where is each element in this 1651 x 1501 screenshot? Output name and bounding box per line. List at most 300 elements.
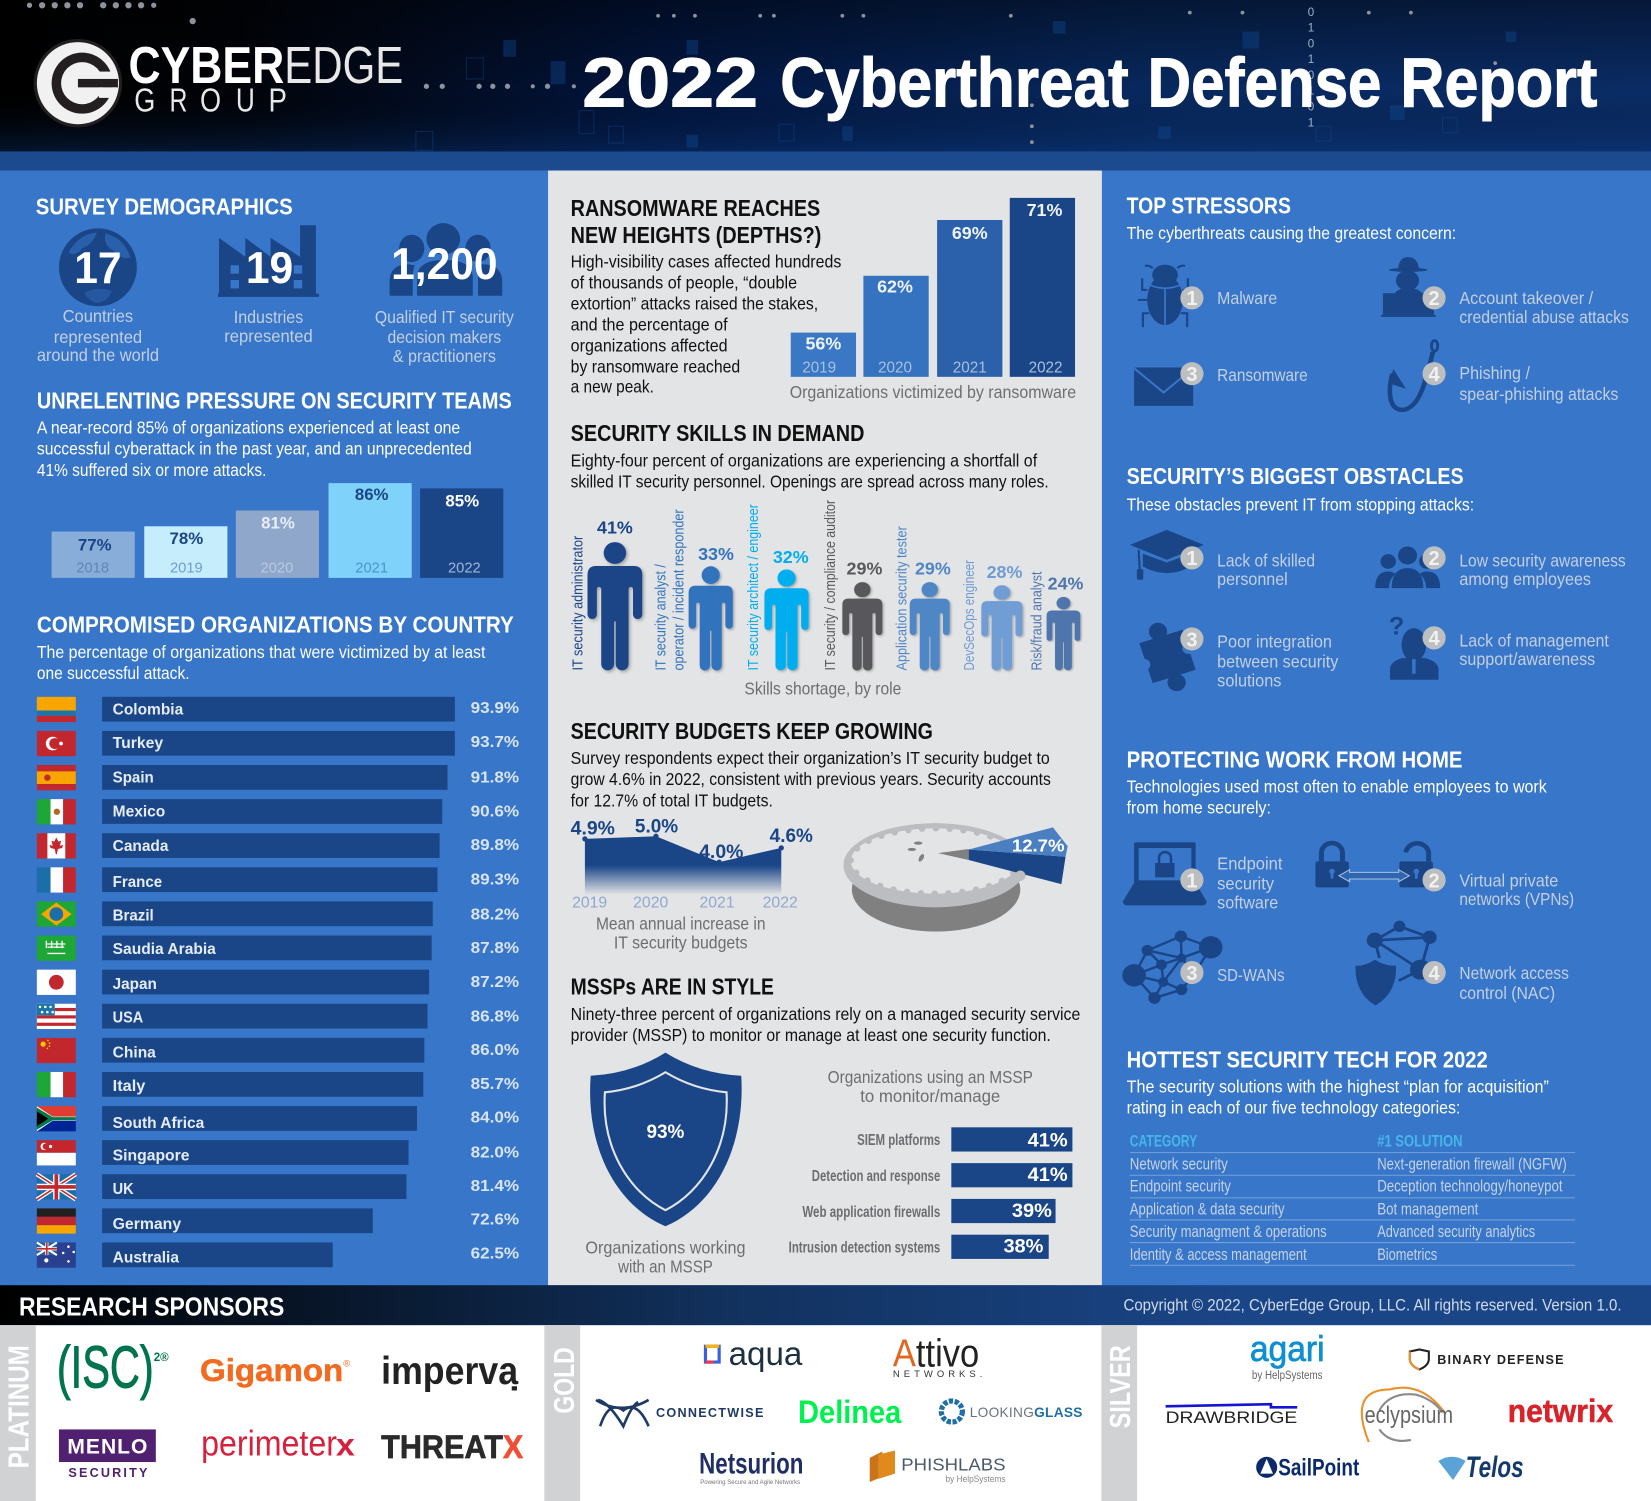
logo: Binary Defense: BINARY DEFENSE xyxy=(1437,1353,1564,1367)
area chart: mean annual increase: 4.0% xyxy=(699,842,744,863)
title: Defense xyxy=(1148,43,1381,121)
text block: ransomware description: extortion” attacks raised the stakes, xyxy=(571,293,818,313)
caption: organizations working with an MSSP: Organizations working xyxy=(585,1238,745,1258)
item: poor integration xyxy=(1138,623,1338,691)
stat: 17 countries: 17 xyxy=(74,244,122,293)
text block: ransomware description: and the percentage of xyxy=(571,315,728,335)
text block: ransomware description: High-visibility cases affected hundreds xyxy=(571,251,841,271)
text block: budgets description: Survey respondents expect their organization’s IT security budget to xyxy=(571,748,1050,768)
country names: Turkey xyxy=(113,735,163,752)
section: MSSPs xyxy=(571,974,1080,1277)
item: network access control: Network access xyxy=(1459,963,1569,983)
text block: pressure description xyxy=(37,418,472,480)
logo: ThreatX: THREATX xyxy=(381,1428,524,1465)
text: industries represented: represented xyxy=(224,326,313,346)
section: security's biggest obstacles xyxy=(1127,463,1626,691)
figure: application security tester xyxy=(895,526,951,671)
bar chart: attacks by year: 86% xyxy=(355,485,389,504)
caption: organizations using an MSSP xyxy=(828,1067,1033,1106)
text block: budgets description: grow 4.6% in 2022, consistent with previous years. Security accounts xyxy=(571,769,1051,789)
header banner: 0 xyxy=(1308,70,1314,82)
heading: ransomware xyxy=(571,195,821,248)
tier tag: platinum: PLATINUM xyxy=(3,1345,35,1468)
caption: mean annual increase xyxy=(596,913,765,952)
item: SD-WANs: 3 xyxy=(1186,963,1197,985)
bar chart: MSSP functions: 39% xyxy=(1012,1201,1052,1222)
text block: country description: one successful attack. xyxy=(37,663,190,683)
heading: security budgets: SECURITY BUDGETS KEEP GROWING xyxy=(571,718,933,744)
header banner: 0 xyxy=(1308,102,1314,114)
table: category and #1 solution: Endpoint security xyxy=(1130,1178,1232,1196)
logo: Menlo Security: MENLO xyxy=(67,1436,147,1459)
icon: envelope xyxy=(1134,368,1193,406)
logo: LookingGlass xyxy=(941,1401,1082,1422)
flags xyxy=(37,697,76,1268)
bar chart: attacks by year: 2020 xyxy=(261,561,293,577)
icon: flag France xyxy=(37,867,76,893)
text block: skills description: Eighty-four percent of organizations are experiencing a shortfall of xyxy=(571,450,1037,470)
icon: laptop with lock xyxy=(1123,842,1206,905)
item: ransomware xyxy=(1134,362,1308,406)
table: category and #1 solution: Application & data security xyxy=(1130,1201,1285,1219)
figure: risk/fraud analyst: 24% xyxy=(1048,573,1084,593)
heading: security skills: SECURITY SKILLS IN DEMAND xyxy=(571,420,864,446)
table: category and #1 solution: #1 SOLUTION xyxy=(1377,1131,1463,1150)
heading: obstacles: SECURITY’S BIGGEST OBSTACLES xyxy=(1127,463,1464,489)
caption: skills shortage: Skills shortage, by role xyxy=(744,679,901,699)
section: protecting work from home xyxy=(1123,746,1574,1005)
bar chart: MSSP functions: Web application firewalls xyxy=(802,1204,940,1221)
logo: Eclypsium: eclypsium xyxy=(1365,1402,1453,1429)
area chart: mean annual increase: 5.0% xyxy=(635,817,678,838)
caption: organizations victimized: Organizations victimized by ransomware xyxy=(790,382,1076,402)
logo wordmark xyxy=(128,36,403,120)
text: countries represented xyxy=(37,306,159,365)
text block: skills description xyxy=(571,450,1049,491)
figure: compliance auditor: 29% xyxy=(847,559,882,579)
logo: Imperva: imperva xyxy=(381,1350,518,1393)
bar chart: organizations victimized by ransomware: 2022 xyxy=(1029,360,1063,377)
header banner: 0 xyxy=(1308,7,1314,19)
country names: UK xyxy=(113,1181,134,1198)
icon: bug xyxy=(1138,265,1192,327)
item: SD-WANs: SD-WANs xyxy=(1217,965,1285,985)
country percentages xyxy=(471,700,519,1262)
table: category and #1 solution xyxy=(1130,1131,1575,1265)
item: account takeover xyxy=(1381,257,1629,327)
icon: shield 93%: 93% xyxy=(646,1122,685,1143)
figure: IT security analyst: 33% xyxy=(698,544,734,564)
heading: unrelenting pressure: UNRELENTING PRESSURE ON SECURITY TEAMS xyxy=(37,387,512,413)
figure: IT security analyst: operator / incident responder xyxy=(671,509,687,671)
icon: fish hook xyxy=(1390,341,1438,410)
bar chart: MSSP functions: 38% xyxy=(1003,1237,1044,1258)
heading: compromised organizations: COMPROMISED ORGANIZATIONS BY COUNTRY xyxy=(37,612,514,638)
bar chart: MSSP functions: 41% xyxy=(1028,1165,1068,1186)
bar chart: MSSP functions: Intrusion detection systems xyxy=(789,1240,940,1257)
text block: pressure description: A near-record 85% of organizations experienced at least one xyxy=(37,418,460,438)
title: Cyberthreat xyxy=(780,43,1129,121)
text block: hottest tech intro: rating in each of our five technology categories: xyxy=(1127,1098,1460,1118)
section: survey demographics xyxy=(36,194,514,366)
icon: flag Japan xyxy=(37,970,76,995)
area chart: mean annual increase: 2019 xyxy=(572,894,607,911)
country names: Italy xyxy=(113,1078,146,1095)
country percentages: 91.8% xyxy=(471,770,519,787)
icon: logo mark xyxy=(34,39,122,127)
text block: country description xyxy=(37,642,485,683)
item: phishing: 4 xyxy=(1429,364,1441,386)
logo: Menlo Security xyxy=(59,1429,156,1480)
logo: PhishLabs xyxy=(870,1450,1006,1484)
item: VPNs: 2 xyxy=(1429,870,1440,892)
stat: 19 industries xyxy=(218,225,319,346)
bar chart: organizations victimized by ransomware: 69% xyxy=(952,223,988,243)
table: category and #1 solution: CATEGORY xyxy=(1130,1131,1197,1150)
item: endpoint security: Endpoint xyxy=(1217,853,1282,873)
country names xyxy=(113,702,216,1267)
icon: people group xyxy=(390,223,502,296)
caption: mean annual increase: IT security budgets xyxy=(614,932,748,952)
item: poor integration: Poor integration xyxy=(1217,631,1332,651)
header banner xyxy=(0,0,1651,171)
bar chart: organizations victimized by ransomware: 2020 xyxy=(878,360,912,377)
bar chart: attacks by year: 78% xyxy=(170,529,203,548)
figure: compliance auditor xyxy=(823,500,882,671)
area chart: mean annual increase: 2020 xyxy=(633,894,668,911)
item: lack of skilled personnel: Lack of skilled xyxy=(1217,550,1315,570)
logo wordmark: R xyxy=(170,83,187,120)
tier tag: gold: GOLD xyxy=(549,1347,581,1414)
pictogram chart: skills shortage by role xyxy=(570,500,1084,671)
table: category and #1 solution: Deception technology/honeypot xyxy=(1377,1178,1563,1196)
logo wordmark: O xyxy=(200,83,221,120)
pie illustration: 12.7% of IT budget: 12.7% xyxy=(1012,836,1065,856)
icon: graduation cap xyxy=(1130,530,1204,580)
logo: PhishLabs: PHISHLABS xyxy=(901,1454,1006,1474)
bar chart: attacks by year: 2021 xyxy=(355,561,388,577)
caption: organizations working with an MSSP xyxy=(585,1238,745,1277)
panel: sponsors xyxy=(0,1325,1651,1501)
country percentages: 87.2% xyxy=(471,974,519,991)
text block: budgets description: for 12.7% of total IT budgets. xyxy=(571,790,773,810)
title xyxy=(582,43,1597,121)
icon: flag China xyxy=(37,1038,76,1063)
logo: (ISC)2: 2® xyxy=(154,1352,169,1364)
country percentages: 88.2% xyxy=(471,906,519,923)
header banner: 1 xyxy=(1308,117,1314,129)
text: qualified IT security decision makers xyxy=(375,307,514,366)
item: lack of management support: support/awareness xyxy=(1459,649,1595,669)
tier tag: silver xyxy=(1101,1325,1137,1501)
text block: hottest tech intro: The security solutions with the highest “plan for acquisition” xyxy=(1127,1077,1549,1097)
figure: DevSecOps engineer: 28% xyxy=(987,562,1022,582)
figure: risk/fraud analyst: Risk/fraud analyst xyxy=(1029,572,1045,671)
country percentages: 87.8% xyxy=(471,940,519,957)
text block: work from home intro: Technologies used most often to enable employees to work xyxy=(1127,777,1547,797)
text: qualified IT security decision makers: decision makers xyxy=(387,327,501,347)
logo wordmark: EDGE xyxy=(284,36,403,94)
heading: ransomware: RANSOMWARE REACHES xyxy=(571,195,820,221)
heading: survey demographics: SURVEY DEMOGRAPHICS xyxy=(36,194,293,220)
item: SD-WANs xyxy=(1124,932,1285,1003)
logo: Netwrix: netwrix xyxy=(1508,1392,1613,1429)
logo wordmark: P xyxy=(268,83,287,120)
header banner: 1 xyxy=(1308,86,1314,98)
figure: IT security analyst: IT security analyst / xyxy=(653,563,669,671)
country percentages: 86.0% xyxy=(471,1042,519,1059)
item: low security awareness: Low security awareness xyxy=(1459,550,1626,570)
item: endpoint security: security xyxy=(1217,873,1274,893)
country names: South Africa xyxy=(113,1115,204,1132)
figure: IT security architect: IT security architect / engineer xyxy=(746,504,762,671)
item: account takeover: 2 xyxy=(1429,288,1440,310)
icon: puzzle piece xyxy=(1138,623,1196,691)
logo: SailPoint xyxy=(1256,1455,1359,1482)
country names: Brazil xyxy=(113,907,154,924)
country bars xyxy=(102,697,455,1267)
country names: Canada xyxy=(113,838,169,855)
bar chart: attacks by year: 2019 xyxy=(170,561,203,577)
icon: shield and network xyxy=(1355,921,1437,1005)
section: unrelenting pressure xyxy=(37,387,512,578)
area chart: mean annual increase: 2022 xyxy=(763,894,798,911)
icon: flag Turkey xyxy=(37,731,76,756)
bar chart: MSSP functions: Detection and response xyxy=(812,1168,940,1185)
country percentages: 84.0% xyxy=(471,1110,519,1127)
icon: factory xyxy=(218,225,319,297)
title: Report xyxy=(1400,43,1597,121)
bar chart: attacks by year: 85% xyxy=(445,491,479,510)
icon: flag Canada xyxy=(37,833,76,858)
item: account takeover: Account takeover / xyxy=(1459,288,1593,308)
panel: middle column background xyxy=(548,171,1102,1285)
bar chart: organizations victimized by ransomware: 2019 xyxy=(802,360,836,377)
item: malware xyxy=(1138,265,1277,327)
item: VPNs xyxy=(1315,843,1574,909)
title: 2022 xyxy=(582,43,758,121)
item: endpoint security: 1 xyxy=(1186,870,1197,892)
country names: Spain xyxy=(113,770,154,787)
section: ransomware xyxy=(571,195,1076,402)
figure: IT security administrator xyxy=(570,518,642,671)
country percentages: 72.6% xyxy=(471,1212,519,1229)
country percentages: 93.9% xyxy=(471,700,519,717)
logo: Telos xyxy=(1438,1451,1524,1484)
logo: Drawbridge: DRAWBRIDGE xyxy=(1166,1408,1297,1427)
icon: flag Saudi Arabia xyxy=(37,936,76,961)
text block: MSSP description: Ninety-three percent of organizations rely on a managed security service xyxy=(571,1004,1080,1024)
text block: budgets description xyxy=(571,748,1051,810)
bar chart: organizations victimized by ransomware: 56% xyxy=(806,333,841,353)
text: industries represented: Industries xyxy=(234,307,303,327)
item: poor integration: between security xyxy=(1217,651,1338,671)
figure: IT security administrator: IT security administrator xyxy=(570,536,586,671)
item: lack of skilled personnel: personnel xyxy=(1217,569,1288,589)
icon: flag Brazil xyxy=(37,901,76,927)
item: phishing xyxy=(1390,341,1618,410)
item: lack of management support: 4 xyxy=(1429,628,1441,650)
stat: 19 industries: 19 xyxy=(246,244,293,293)
text block: pressure description: successful cyberattack in the past year, and an unprecedented xyxy=(37,439,472,459)
stat: 1,200 decision makers xyxy=(375,223,514,366)
icon: globe xyxy=(59,228,137,306)
bar chart: attacks by year: 81% xyxy=(261,513,295,532)
stat: 17 countries xyxy=(37,228,159,365)
item: phishing: spear-phishing attacks xyxy=(1459,384,1618,404)
logo wordmark: CYBER xyxy=(128,36,284,94)
icon: flag Mexico xyxy=(37,799,76,824)
stat: 1,200 decision makers: 1,200 xyxy=(391,240,498,289)
icon: flag Australia xyxy=(37,1242,76,1268)
logo: SailPoint: SailPoint xyxy=(1278,1455,1359,1482)
tier tag: gold xyxy=(544,1325,581,1501)
text: industries represented xyxy=(224,307,313,346)
area chart: mean annual increase: 4.9% xyxy=(571,819,615,840)
text: qualified IT security decision makers: Qualified IT security xyxy=(375,307,514,327)
icon: hacker xyxy=(1381,257,1436,317)
bar chart: attacks by year: 2022 xyxy=(448,561,481,577)
logo: Agari: agari xyxy=(1250,1329,1325,1369)
country names: France xyxy=(113,874,162,891)
figure: application security tester: Application security tester xyxy=(895,526,911,671)
icon: flag Singapore xyxy=(37,1140,76,1165)
country names: China xyxy=(113,1044,156,1061)
item: poor integration: 3 xyxy=(1186,629,1197,651)
section: compromised organizations by country xyxy=(37,612,519,1268)
country percentages: 81.4% xyxy=(471,1178,519,1195)
logo: Telos: Telos xyxy=(1466,1451,1524,1484)
country names: Germany xyxy=(113,1216,181,1233)
logo: CyberEdge Group xyxy=(34,36,403,127)
header banner: 1 xyxy=(1308,23,1314,35)
country names: Australia xyxy=(113,1250,179,1267)
footer bar xyxy=(0,1285,1651,1325)
icon: flag Spain xyxy=(37,765,76,790)
country names: Saudia Arabia xyxy=(113,941,216,958)
text: countries represented: Countries xyxy=(63,306,133,326)
logo: Delinea: Delinea xyxy=(798,1393,902,1430)
figure: application security tester: 29% xyxy=(915,559,951,579)
text: countries represented: around the world xyxy=(37,345,159,365)
item: lack of skilled personnel xyxy=(1130,530,1315,589)
bar chart: organizations victimized by ransomware xyxy=(791,198,1075,377)
logo: PhishLabs: by HelpSystems xyxy=(946,1474,1006,1484)
bar chart: MSSP functions xyxy=(789,1127,1072,1259)
bar chart: MSSP functions: 41% xyxy=(1028,1130,1068,1151)
figure: DevSecOps engineer: DevSecOps engineer xyxy=(962,560,978,671)
item: low security awareness: 2 xyxy=(1429,548,1440,570)
text: countries represented: represented xyxy=(54,327,142,347)
text block: ransomware description: organizations affected xyxy=(571,336,728,356)
icon: employees group xyxy=(1375,546,1440,588)
country percentages: 89.8% xyxy=(471,837,519,854)
logo: Attivo Networks: Attivo xyxy=(893,1332,979,1375)
country percentages: 86.8% xyxy=(471,1009,519,1026)
pie illustration: 12.7% of IT budget xyxy=(843,823,1068,932)
table: category and #1 solution: Bot management xyxy=(1377,1201,1479,1219)
bar chart: organizations victimized by ransomware: 62% xyxy=(877,277,913,297)
item: network access control: control (NAC) xyxy=(1459,983,1555,1003)
table: category and #1 solution: Network security xyxy=(1130,1155,1228,1173)
heading: work from home: PROTECTING WORK FROM HOME xyxy=(1127,746,1463,772)
logo: LookingGlass: LOOKINGGLASS xyxy=(970,1405,1082,1420)
text block: ransomware description: of thousands of people, “double xyxy=(571,272,797,292)
table: category and #1 solution: Advanced security analytics xyxy=(1377,1223,1535,1241)
icon: flag USA xyxy=(37,1004,76,1029)
item: lack of skilled personnel: 1 xyxy=(1186,548,1197,570)
country percentages: 93.7% xyxy=(471,734,519,751)
logo: Gigamon: ® xyxy=(343,1358,350,1369)
text block: ransomware description: by ransomware reached xyxy=(571,357,740,377)
item: ransomware: 3 xyxy=(1186,364,1197,386)
icon: shield 93% xyxy=(590,1053,742,1226)
icon: flag Germany xyxy=(37,1208,76,1234)
logo: Attivo Networks: NETWORKS. xyxy=(893,1369,982,1380)
logo: PerimeterX: perimeter xyxy=(201,1424,337,1464)
item: malware: 1 xyxy=(1186,288,1197,310)
icon: confused manager xyxy=(1389,613,1438,680)
icon: flag Italy xyxy=(37,1072,76,1097)
logo wordmark: U xyxy=(236,83,255,120)
caption: mean annual increase: Mean annual increase in xyxy=(596,913,765,933)
bar chart: attacks by year: 2018 xyxy=(76,561,109,577)
logo: Netsurion xyxy=(699,1448,803,1486)
heading: hottest security tech: HOTTEST SECURITY TECH FOR 2022 xyxy=(1127,1046,1488,1072)
item: VPNs: networks (VPNs) xyxy=(1459,889,1574,909)
heading: research sponsors: RESEARCH SPONSORS xyxy=(19,1292,284,1322)
bar chart: attacks by year: 77% xyxy=(78,536,112,555)
text block: work from home intro: from home securely: xyxy=(1127,798,1271,818)
figure: compliance auditor: IT security / compliance auditor xyxy=(823,500,839,671)
table: category and #1 solution: Security managment & operations xyxy=(1130,1223,1327,1241)
logo: ConnectWise xyxy=(596,1400,763,1426)
tier tag: silver: SILVER xyxy=(1105,1345,1137,1428)
figure: IT security analyst xyxy=(653,509,734,671)
country percentages: 90.6% xyxy=(471,803,519,820)
item: endpoint security xyxy=(1123,842,1282,912)
icon: flag Colombia xyxy=(37,697,76,722)
area chart: mean annual increase xyxy=(571,817,813,911)
logo: Eclypsium xyxy=(1362,1388,1453,1442)
item: phishing: Phishing / xyxy=(1459,363,1530,383)
text: obstacles intro: These obstacles prevent IT from stopping attacks: xyxy=(1127,495,1474,515)
table: category and #1 solution: Biometrics xyxy=(1377,1246,1437,1264)
country percentages: 85.7% xyxy=(471,1076,519,1093)
heading: MSSPs: MSSPs ARE IN STYLE xyxy=(571,974,774,1000)
item: endpoint security: software xyxy=(1217,892,1278,912)
item: network access control: 4 xyxy=(1429,963,1441,985)
table: category and #1 solution: Identity & access management xyxy=(1130,1246,1307,1264)
country names: Mexico xyxy=(113,803,166,820)
text block: hottest tech intro xyxy=(1127,1077,1549,1118)
section: security budgets xyxy=(571,718,1068,952)
logo: Menlo Security: SECURITY xyxy=(68,1466,148,1480)
item: low security awareness: among employees xyxy=(1459,569,1591,589)
icon: mesh network xyxy=(1124,932,1221,1003)
text block: MSSP description: provider (MSSP) to monitor or manage at least one security function. xyxy=(571,1025,1051,1045)
logo: (ISC)2: (ISC) xyxy=(57,1335,154,1400)
icon: confused manager: ? xyxy=(1389,613,1404,641)
text block: country description: The percentage of organizations that were victimized by at least xyxy=(37,642,485,662)
text block: skills description: skilled IT security personnel. Openings are spread across many roles. xyxy=(571,471,1049,491)
bar chart: attacks by year xyxy=(52,483,503,578)
caption: organizations using an MSSP: Organizations using an MSSP xyxy=(828,1067,1033,1087)
table: category and #1 solution: Next-generation firewall (NGFW) xyxy=(1377,1155,1567,1173)
logo: Aqua: aqua xyxy=(729,1336,803,1373)
bar chart: organizations victimized by ransomware: 2021 xyxy=(953,360,987,377)
text: stressors intro: The cyberthreats causing the greatest concern: xyxy=(1127,223,1456,243)
